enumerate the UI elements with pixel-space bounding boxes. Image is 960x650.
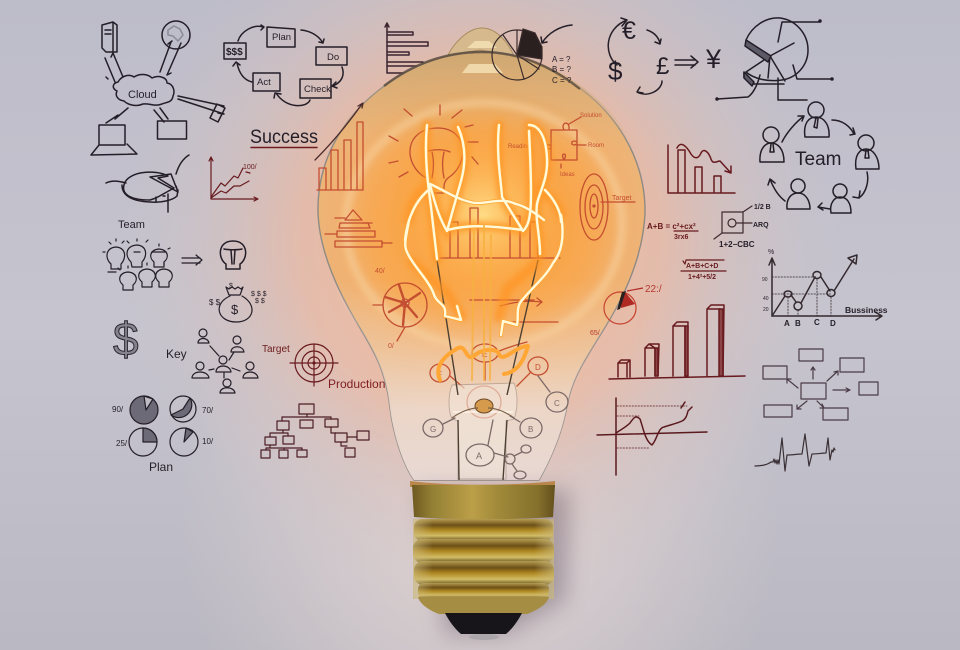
3D pie chart [716, 18, 833, 100]
horizontal bar chart [385, 23, 453, 75]
thread 4 [418, 583, 549, 599]
lower grey node drawings [423, 376, 568, 479]
person left [760, 127, 784, 162]
arrow to top pie [541, 25, 572, 43]
letter nodes upper: E [482, 350, 487, 359]
puzzle [508, 113, 604, 178]
label: Target: Target [262, 344, 290, 355]
thread edge highlight [413, 519, 554, 599]
filament orange outline [405, 125, 562, 380]
formula A+B: 3rx6 [674, 234, 689, 241]
team cycle [760, 102, 879, 213]
icon: big bulb [220, 241, 246, 269]
thread 2 [413, 539, 554, 563]
filament glow [409, 125, 561, 317]
line chart 100% [209, 157, 258, 201]
formula root [681, 260, 726, 281]
contact tip [469, 634, 499, 640]
laptop icon [91, 125, 137, 155]
pie 25%: 25/ [116, 439, 128, 448]
filament vertical stem [472, 225, 491, 380]
icon: money bag: $ [229, 283, 233, 290]
cog wheel [373, 268, 427, 350]
node A with molecule [466, 420, 531, 479]
business line chart: Bussiness [845, 305, 888, 315]
black insulator [445, 613, 522, 634]
ECG trace [755, 434, 835, 471]
business line chart: C [814, 318, 820, 327]
business line chart: D [830, 319, 836, 328]
filament [405, 125, 562, 380]
Do box: Do [327, 52, 339, 63]
glass seal [410, 481, 555, 487]
dark rim top [384, 52, 580, 89]
Check box: Check [304, 84, 331, 95]
22% pie: 65/ [590, 330, 600, 337]
pie 70%: 70/ [202, 406, 214, 415]
bulb glass [318, 28, 645, 480]
people network [192, 329, 258, 393]
formula A+B: A+B = c²+cx² [647, 222, 696, 231]
A B C questions: C = ? [552, 76, 572, 85]
letter nodes upper: F [437, 370, 442, 379]
letter nodes upper [430, 342, 548, 418]
node G [423, 418, 455, 437]
currency symbols: € [622, 17, 636, 45]
filament hot core [405, 125, 562, 335]
Plan caption: Plan [149, 460, 173, 474]
top pie drawing [492, 29, 542, 80]
puzzle: Ideas [560, 172, 575, 178]
cog wheel: 0/ [388, 343, 394, 350]
node C [538, 376, 568, 412]
business line chart: 40 [763, 296, 769, 302]
business line chart: A [784, 319, 790, 328]
icon: money bag: $ [231, 302, 239, 317]
title: Success: Success [250, 127, 318, 148]
org chart [261, 404, 369, 458]
A B C questions: A = ? [552, 55, 571, 64]
globe icon [162, 21, 190, 49]
node A with molecule: A [476, 451, 482, 461]
icon: money bag: $ $ [255, 298, 265, 305]
pyramid [325, 210, 392, 247]
cog wheel: 40/ [375, 268, 385, 275]
pie 10%: 10/ [202, 437, 214, 446]
pie 90%: 90/ [112, 405, 124, 414]
idea bulb drawing [389, 105, 478, 193]
thread 1 [414, 519, 553, 541]
business line chart: 90 [762, 277, 768, 283]
phone icon [210, 104, 225, 122]
node B: B [528, 425, 533, 434]
hot centre glow [388, 105, 578, 325]
base skirt [418, 597, 549, 614]
letter nodes upper: D [535, 363, 541, 372]
22% pie [590, 284, 662, 337]
person right [856, 135, 879, 169]
Team label: Team [795, 149, 841, 170]
bulb base shadow [420, 490, 570, 635]
person bottom left [787, 179, 810, 209]
business line chart: 20 [763, 307, 769, 313]
puzzle: Solution [580, 113, 602, 119]
collar [412, 485, 555, 519]
formula root: 1+4²+5/2 [688, 274, 716, 281]
currency cycle [608, 17, 722, 94]
PDCA cycle [224, 25, 347, 106]
currency symbols: £ [656, 53, 669, 80]
glass nipple [448, 28, 514, 56]
$$$ box: $$$ [226, 47, 243, 58]
icon: money bag: $ $ $ [251, 291, 267, 298]
glass envelope [318, 52, 645, 480]
thread 3 [414, 561, 554, 585]
icon: target [290, 344, 338, 386]
small bars behind filament [440, 208, 560, 322]
lower glass fade [331, 280, 629, 480]
currency symbols [608, 17, 669, 86]
A B C questions: B = ? [552, 65, 571, 74]
inner warm glow [362, 114, 606, 330]
box diagram ARQ: 1/2 B [754, 204, 771, 211]
glass top tan [329, 53, 635, 150]
node B [510, 416, 542, 438]
node C: C [554, 399, 560, 408]
icon: money bag [209, 283, 267, 322]
formula A+B [647, 222, 698, 241]
icon: money bag: $ $ [209, 298, 221, 307]
box diagram ARQ: 1+2−CBC [719, 240, 755, 249]
cloud: Cloud [128, 89, 157, 101]
brass screw base [410, 481, 555, 640]
Team caption: Team [118, 219, 145, 231]
drawings through the glass [315, 103, 635, 418]
currency symbols: $ [608, 56, 623, 86]
inner reflected ring [346, 103, 622, 347]
glass stem and wires [437, 260, 538, 480]
line chart 100%: 100/ [243, 164, 257, 171]
yen symbol: ¥ [705, 44, 722, 74]
Act box: Act [257, 77, 271, 88]
label: Production: Production [328, 377, 385, 391]
label: Key: Key [166, 347, 187, 361]
icon: big dollar: $ [113, 313, 139, 365]
falling bar chart [668, 144, 735, 193]
icon row: bulbs [103, 239, 172, 290]
business line chart: B [795, 319, 801, 328]
tablet icon [158, 121, 186, 139]
stock line chart [597, 398, 707, 475]
puzzle: Room [588, 143, 604, 149]
nipple reflections [462, 41, 503, 73]
box diagram ARQ [714, 204, 771, 249]
business line chart: % [768, 249, 774, 256]
arrow: double [182, 255, 202, 265]
box diagram ARQ: ARQ [753, 222, 769, 229]
node G: G [430, 425, 436, 434]
3D bar chart [609, 305, 745, 379]
Plan box: Plan [272, 32, 291, 43]
server icon [102, 22, 117, 52]
person top [805, 102, 829, 137]
A B C questions [552, 55, 572, 85]
target ellipse [580, 174, 635, 240]
puzzle: Reading [508, 144, 530, 150]
stem bead [475, 399, 493, 413]
nipple reflection through glass [462, 64, 503, 73]
icon: cloud network [91, 21, 225, 155]
22% pie: 22:/ [645, 284, 662, 295]
formula root: A+B+C+D [686, 263, 718, 270]
bar chart with rising arrow [315, 103, 363, 190]
icon: team pie [106, 155, 189, 231]
box flow diagram [763, 349, 878, 420]
business line chart [762, 249, 888, 328]
percent pies [112, 396, 214, 474]
person bottom right [831, 184, 851, 213]
target ellipse: Target [612, 195, 632, 202]
